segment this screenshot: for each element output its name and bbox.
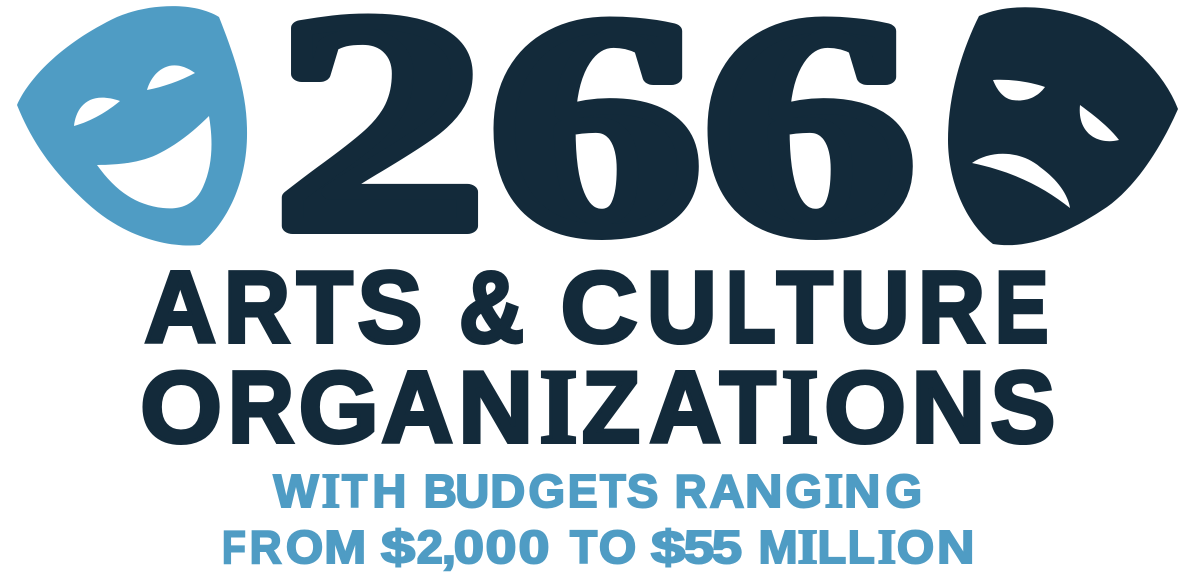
icon: smiling comedy mask <box>17 6 247 246</box>
heading line: ORGANIZATIONS: A <box>382 352 453 464</box>
subheading line: WITH BUDGETS RANGING: G <box>786 465 822 517</box>
subheading line: FROM $2,000 TO $55 MILLION: 5 <box>712 521 742 573</box>
subheading line: FROM $2,000 TO $55 MILLION: I <box>878 519 896 574</box>
subheading line: FROM $2,000 TO $55 MILLION: M <box>758 521 798 573</box>
subheading line: FROM $2,000 TO $55 MILLION: 0 <box>518 521 550 573</box>
subheading line: FROM $2,000 TO $55 MILLION: I <box>798 519 818 574</box>
subheading line: WITH BUDGETS RANGING: D <box>490 465 525 517</box>
heading line: ORGANIZATIONS: T <box>720 352 776 464</box>
subheading line: FROM $2,000 TO $55 MILLION: N <box>937 521 974 573</box>
subheading line: WITH BUDGETS RANGING: U <box>455 465 489 517</box>
big number 266 <box>275 0 914 296</box>
subheading line: FROM $2,000 TO $55 MILLION: O <box>599 521 636 573</box>
heading line: ARTS & CULTURE: T <box>777 252 833 364</box>
heading line: ORGANIZATIONS: I <box>540 348 578 465</box>
heading line: ARTS & CULTURE: L <box>726 252 776 364</box>
icon: sad tragedy mask <box>948 7 1178 245</box>
heading line: ORGANIZATIONS: G <box>299 352 379 464</box>
subheading line: FROM $2,000 TO $55 MILLION: $ <box>381 521 415 573</box>
heading line: ARTS & CULTURE: E <box>995 252 1048 364</box>
subheading line: FROM $2,000 TO $55 MILLION: 0 <box>454 521 484 573</box>
subheading line: FROM $2,000 TO $55 MILLION: L <box>848 521 875 573</box>
subheading line: WITH BUDGETS RANGING: T <box>600 465 626 517</box>
subheading line: FROM $2,000 TO $55 MILLION: 2 <box>417 521 443 573</box>
heading line: ARTS & CULTURE: R <box>224 252 290 364</box>
heading line: ORGANIZATIONS: O <box>140 352 222 464</box>
heading line: ARTS & CULTURE: R <box>918 252 985 364</box>
subheading line: FROM $2,000 TO $55 MILLION: L <box>818 521 846 573</box>
heading line: ARTS & CULTURE: A <box>144 252 216 364</box>
heading line: ORGANIZATIONS: S <box>991 352 1055 464</box>
heading line: ARTS & CULTURE: U <box>840 252 910 364</box>
subheading line: WITH BUDGETS RANGING: G <box>528 465 565 517</box>
subheading line: WITH BUDGETS RANGING: E <box>568 465 598 517</box>
subheading line: FROM $2,000 TO $55 MILLION: M <box>324 521 366 573</box>
heading line: ORGANIZATIONS: N <box>458 352 533 464</box>
heading line: ARTS & CULTURE: S <box>358 252 422 364</box>
subheading line: FROM $2,000 TO $55 MILLION: F <box>222 521 246 573</box>
heading line: ORGANIZATIONS: O <box>824 352 906 464</box>
subheading line: WITH BUDGETS RANGING: A <box>710 465 744 517</box>
subheading line: WITH BUDGETS RANGING: B <box>424 465 457 517</box>
heading line: ORGANIZATIONS: R <box>228 352 294 464</box>
heading line: ORGANIZATIONS: Z <box>582 352 640 464</box>
subheading line: FROM $2,000 TO $55 MILLION: 5 <box>684 521 714 573</box>
subheading line: FROM $2,000 TO $55 MILLION: R <box>250 521 282 573</box>
subheading line: WITH BUDGETS RANGING: I <box>322 463 340 518</box>
heading line: ORGANIZATIONS: A <box>650 352 721 464</box>
subheading line: WITH BUDGETS RANGING: W <box>274 465 319 517</box>
subheading line: WITH BUDGETS RANGING: I <box>825 463 843 518</box>
subheading line: FROM $2,000 TO $55 MILLION: O <box>897 521 934 573</box>
subheading line: FROM $2,000 TO $55 MILLION: 0 <box>486 521 516 573</box>
heading line: ARTS & CULTURE: & <box>459 252 524 364</box>
heading line: ARTS & CULTURE: U <box>647 252 717 364</box>
subheading line: WITH BUDGETS RANGING: G <box>886 465 922 517</box>
subheading line: FROM $2,000 TO $55 MILLION: , <box>442 521 456 573</box>
subheading line: WITH BUDGETS RANGING: T <box>342 465 367 517</box>
subheading line: WITH BUDGETS RANGING: N <box>844 465 880 517</box>
subheading line: FROM $2,000 TO $55 MILLION: O <box>286 521 323 573</box>
subheading line: FROM $2,000 TO $55 MILLION: $ <box>651 521 685 573</box>
heading line: ARTS & CULTURE: T <box>297 252 353 364</box>
subheading line: WITH BUDGETS RANGING: R <box>675 465 707 517</box>
heading line: ORGANIZATIONS: N <box>912 352 985 464</box>
subheading line: WITH BUDGETS RANGING: H <box>372 465 406 517</box>
subheading line: FROM $2,000 TO $55 MILLION: T <box>570 521 597 573</box>
subheading line: WITH BUDGETS RANGING: N <box>745 465 782 517</box>
subheading line: WITH BUDGETS RANGING: S <box>627 465 658 517</box>
heading line: ARTS & CULTURE: C <box>561 252 638 364</box>
heading line: ORGANIZATIONS: I <box>782 348 818 465</box>
